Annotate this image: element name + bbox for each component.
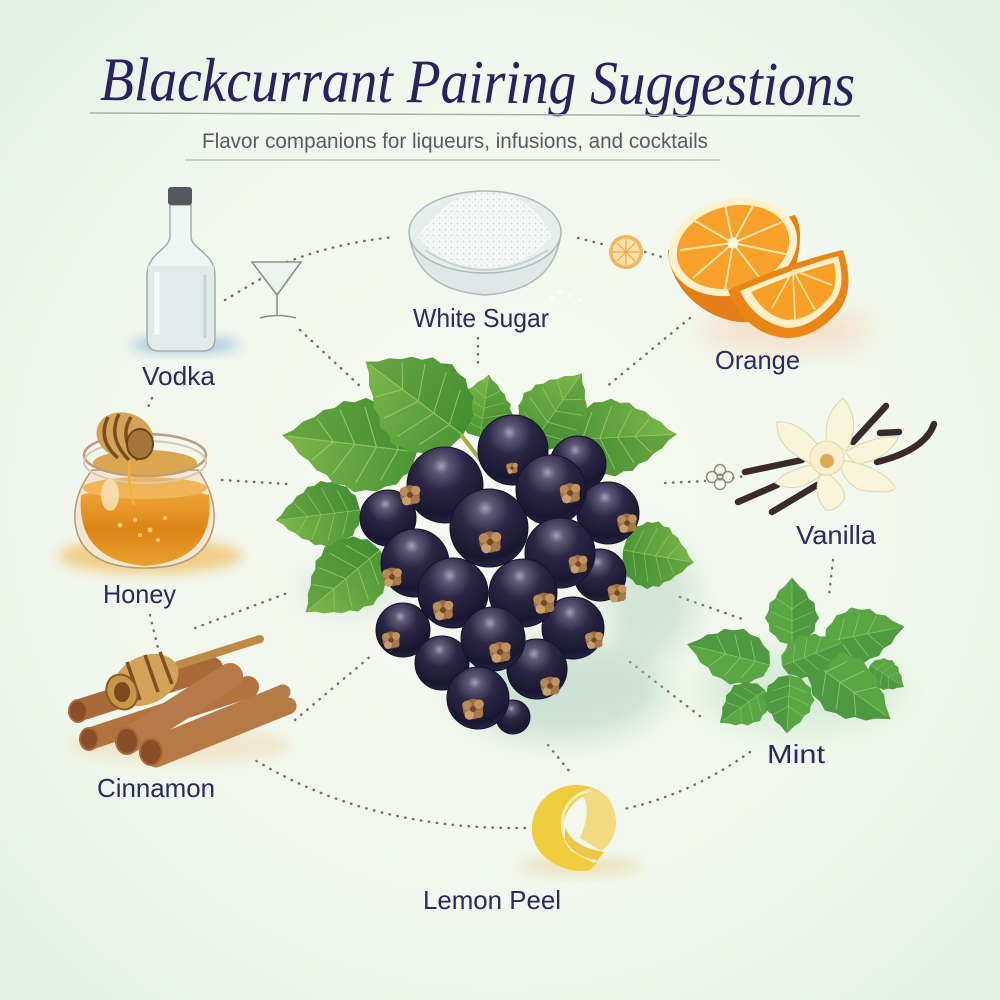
leaves: [272, 322, 700, 641]
label: Cinnamon: Cinnamon: [97, 773, 215, 803]
watercolor wash: [300, 540, 695, 740]
honey dipper: [90, 405, 160, 467]
icon: orange: [658, 185, 870, 350]
label: Mint: Mint: [767, 739, 826, 769]
dipper: [101, 639, 260, 716]
label: Orange: Orange: [715, 345, 800, 375]
label: Honey: Honey: [103, 579, 176, 609]
icon: vodka bottle: [130, 187, 240, 353]
label: White Sugar: White Sugar: [413, 303, 549, 333]
icon: martini glass: [252, 262, 301, 318]
icon: small flower outline: [706, 464, 734, 490]
subtitle: Flavor companions for liqueurs, infusions, and cocktails: [202, 130, 708, 153]
icon: vanilla flower and pods: [738, 398, 934, 512]
central blackcurrant cluster: [272, 322, 700, 740]
label: Vodka: Vodka: [142, 361, 216, 391]
icon: mint sprig: [680, 578, 913, 745]
label: Lemon Peel: Lemon Peel: [423, 885, 561, 915]
icon: lemon peel: [520, 785, 640, 875]
icon: honey jar: [58, 405, 242, 574]
icon: small orange slice: [609, 235, 643, 269]
icon: cinnamon sticks and dipper: [69, 639, 290, 765]
berries: [360, 415, 639, 734]
orange wedge: [728, 250, 848, 338]
label: Vanilla: Vanilla: [796, 520, 877, 550]
title: Blackcurrant Pairing Suggestions: [100, 46, 855, 119]
icon: sugar bowl: [409, 191, 581, 301]
stem: [462, 436, 514, 482]
calyx tips: [382, 462, 637, 720]
dotted connectors: [146, 237, 833, 828]
